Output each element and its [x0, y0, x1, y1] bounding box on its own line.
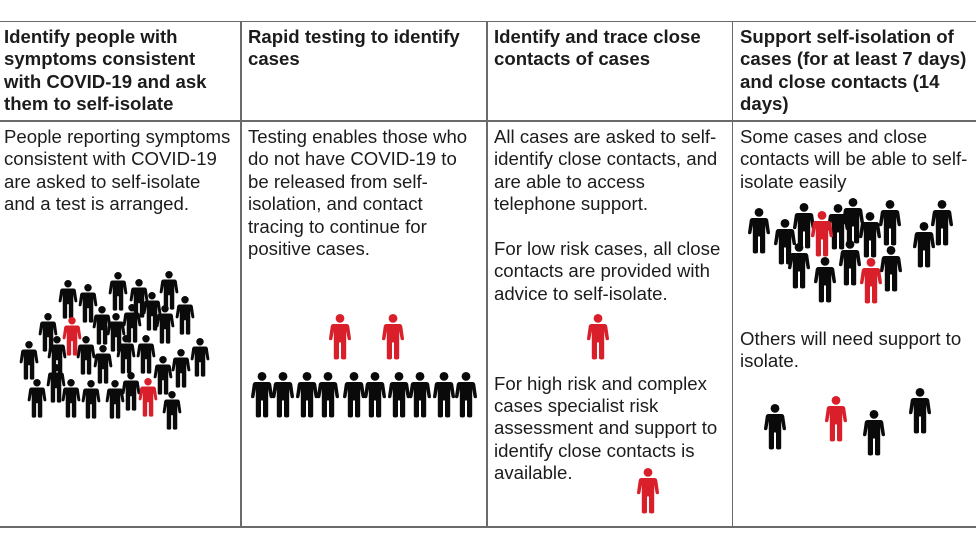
text: all cases — [494, 126, 717, 214]
heading: support self-isolation: cases (for at least 7 days) — [740, 48, 966, 69]
heading: identify people with symptoms: them to self-isolate — [4, 93, 173, 114]
text: high risk cases: identify close contacts is — [494, 440, 694, 461]
text: all cases: identify close contacts, and — [494, 148, 717, 169]
heading: identify people with symptoms: Identify people with — [4, 26, 178, 47]
text: all cases: All cases are asked to self- — [494, 126, 716, 147]
text: high risk cases — [494, 372, 717, 483]
text: low risk cases: For low risk cases, all close — [494, 238, 720, 259]
text: testing description: do not have COVID-19 to — [248, 148, 457, 169]
heading: identify people with symptoms — [4, 26, 207, 114]
heading: support self-isolation: days) — [740, 93, 789, 114]
text: easy self-isolation — [740, 126, 967, 192]
text: high risk cases: assessment and support to — [494, 417, 717, 438]
heading: rapid testing — [248, 26, 460, 69]
text: easy self-isolation: contacts will be able to self- — [740, 148, 967, 169]
text: testing description: tracing to continue for — [248, 216, 427, 237]
text: symptoms description: People reporting symptoms — [4, 126, 230, 147]
heading: identify people with symptoms: symptoms consistent — [4, 48, 195, 69]
heading: support self-isolation — [740, 26, 966, 114]
text: others need support — [740, 328, 961, 371]
text: symptoms description: consistent with COVID-19 — [4, 148, 217, 169]
text: low risk cases: contacts are provided with — [494, 260, 710, 281]
icon group: people who need support to isolate — [764, 388, 931, 456]
icon group: two red cases above row of people — [251, 314, 477, 418]
text: easy self-isolation: isolate easily — [740, 171, 846, 192]
heading: rapid testing: Rapid testing to identify — [248, 26, 460, 47]
icon group: crowd with two red cases — [20, 271, 209, 430]
text: symptoms description: are asked to self-isolate — [4, 171, 200, 192]
text: all cases: telephone support. — [494, 193, 648, 214]
icon: red person, low risk — [587, 314, 609, 360]
icon: red person, high risk — [637, 468, 659, 514]
text: others need support: Others will need support to — [740, 328, 961, 349]
icon group: people able to self-isolate easily — [748, 198, 953, 304]
heading: support self-isolation: Support self-isolation of — [740, 26, 954, 47]
text: easy self-isolation: Some cases and close — [740, 126, 927, 147]
text: all cases: are able to access — [494, 171, 645, 192]
heading: trace close contacts: Identify and trace close — [494, 26, 701, 47]
text: high risk cases: available. — [494, 462, 573, 483]
heading: rapid testing: cases — [248, 48, 300, 69]
text: testing description: Testing enables those who — [248, 126, 467, 147]
heading: trace close contacts: contacts of cases — [494, 48, 650, 69]
heading: support self-isolation: and close contacts (14 — [740, 71, 939, 92]
text: others need support: isolate. — [740, 350, 799, 371]
text: high risk cases: For high risk and complex — [494, 372, 707, 394]
text: high risk cases: cases specialist risk — [494, 395, 658, 416]
text: testing description: isolation, and contact — [248, 193, 423, 214]
heading: trace close contacts — [494, 26, 701, 69]
text: testing description — [248, 126, 467, 259]
text: low risk cases — [494, 238, 720, 304]
text: testing description: positive cases. — [248, 238, 370, 259]
text: symptoms description — [4, 126, 230, 214]
heading: identify people with symptoms: with COVID-19 and ask — [4, 71, 207, 92]
text: symptoms description: and a test is arranged. — [4, 193, 189, 214]
text: low risk cases: advice to self-isolate. — [494, 283, 668, 304]
text: testing description: be released from self- — [248, 171, 428, 192]
